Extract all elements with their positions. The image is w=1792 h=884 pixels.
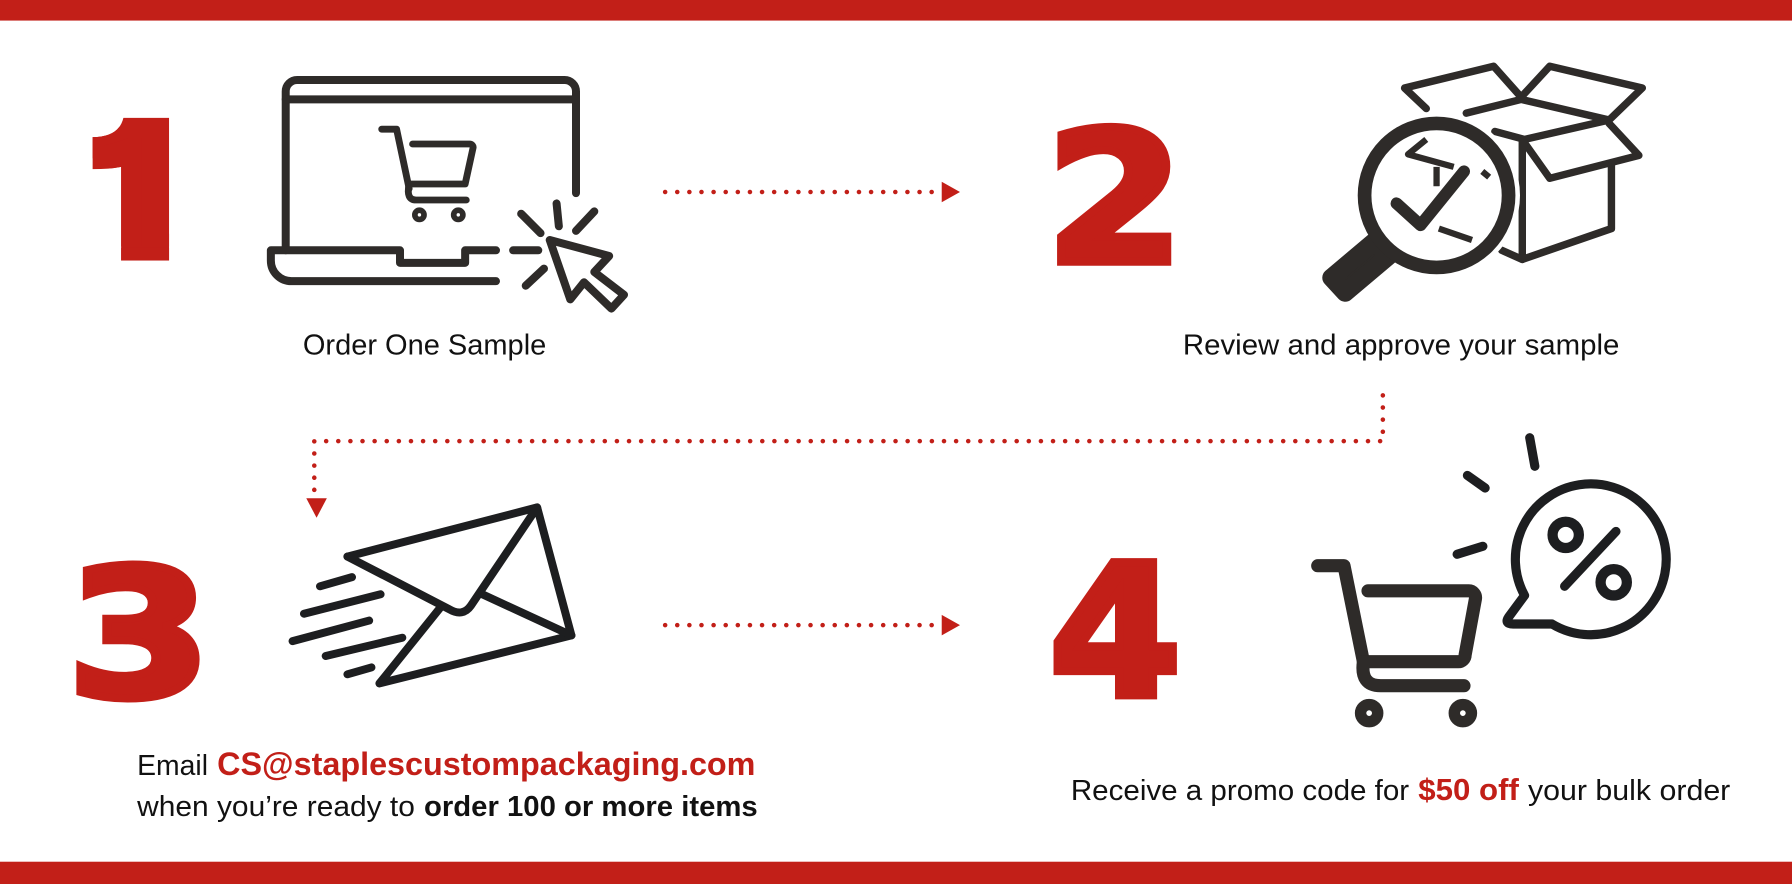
- step 3 text: order 100 or more items: [424, 791, 758, 823]
- bottom red bar: [0, 862, 1792, 884]
- step 4 text: $50 off: [1418, 772, 1520, 807]
- step 3 text: [136, 746, 758, 823]
- icon: shopping cart: [1318, 566, 1476, 722]
- step 4 text: Receive a promo code for: [1071, 775, 1410, 807]
- step 3 text: when you’re ready to: [136, 791, 415, 823]
- step 4 text: your bulk order: [1528, 775, 1731, 807]
- arrow: step 3 to step 4: [665, 615, 960, 635]
- magnifier: [1331, 123, 1509, 293]
- step 3 number: 3: [67, 532, 211, 738]
- step 4 text: [1071, 772, 1731, 807]
- step 4 number: 4: [1049, 526, 1181, 739]
- top red bar: [0, 0, 1792, 21]
- icon: laptop with cart and cursor: [271, 80, 624, 309]
- arrow: step 1 to step 2: [665, 182, 960, 202]
- arrow: step 2 to step 3: [306, 395, 1383, 518]
- step 2 label: Review and approve your sample: [1183, 329, 1619, 361]
- step 2 number: 2: [1046, 93, 1184, 305]
- icon: flying envelope: [293, 507, 571, 683]
- step 3 text: CS@staplescustompackaging.com: [217, 746, 755, 782]
- step 1 number: 1: [43, 45, 216, 315]
- icon: box under magnifier with check: [1331, 66, 1642, 293]
- lens halo: [1353, 112, 1520, 279]
- step 3 text: Email: [137, 750, 208, 782]
- open box: [1405, 66, 1642, 259]
- icon: percent speech bubble: [1457, 438, 1666, 635]
- step 1 label: Order One Sample: [303, 329, 546, 361]
